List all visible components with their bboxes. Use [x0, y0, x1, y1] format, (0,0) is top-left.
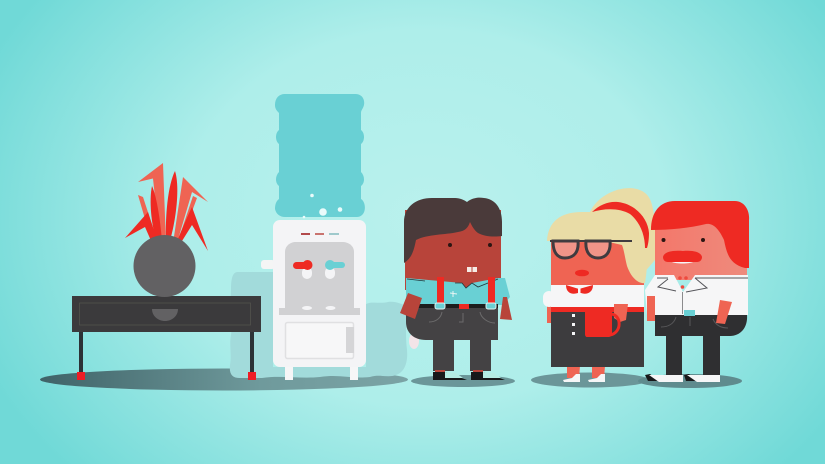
cooler ghost shadow	[230, 272, 407, 378]
buckle	[459, 304, 469, 309]
woman	[531, 202, 649, 388]
glasses	[553, 241, 610, 258]
taps spouts	[302, 267, 335, 279]
suspenders	[437, 277, 495, 304]
table legs	[79, 331, 254, 373]
vase	[134, 235, 196, 297]
clips	[435, 303, 496, 309]
teeth	[467, 267, 477, 272]
moustache	[663, 251, 702, 262]
legs	[433, 335, 491, 371]
pocket lines	[661, 317, 728, 328]
white glove	[409, 333, 419, 349]
head and body skin	[551, 240, 644, 310]
indicator lights	[301, 233, 339, 235]
shadow	[531, 372, 649, 388]
right arm	[500, 297, 512, 320]
hand	[614, 304, 628, 322]
cooler legs	[285, 365, 358, 380]
left arm	[647, 296, 655, 321]
door handle	[346, 327, 354, 353]
button line	[682, 292, 683, 314]
collar	[407, 279, 498, 288]
floor shadow	[40, 368, 408, 390]
red mug	[585, 310, 619, 337]
collar pin	[578, 288, 580, 293]
tabletop	[72, 296, 261, 332]
table feet	[77, 372, 256, 380]
drip tray	[279, 308, 360, 315]
red headband	[592, 202, 649, 248]
buttons	[572, 314, 575, 335]
bow collar	[566, 285, 593, 294]
eyes	[448, 243, 492, 247]
hair	[404, 198, 502, 263]
hot tap	[293, 260, 312, 270]
leaves: red	[125, 171, 208, 251]
trousers	[655, 315, 747, 336]
eyes	[662, 238, 705, 242]
belt	[406, 304, 498, 308]
left arm	[547, 303, 553, 323]
bow tie	[678, 276, 688, 289]
bubbles	[303, 194, 342, 218]
side spout	[261, 260, 275, 269]
belt buckle	[684, 310, 695, 316]
leaves: coral	[138, 163, 208, 244]
dispenser panel	[285, 242, 354, 312]
legs	[567, 366, 605, 378]
pocket pin	[450, 291, 457, 297]
table	[72, 296, 261, 380]
torso skin	[405, 210, 501, 290]
shadow	[638, 374, 742, 388]
legs	[666, 332, 720, 375]
man one	[400, 198, 515, 387]
man two	[638, 201, 749, 388]
water cooler	[261, 94, 366, 380]
skirt	[551, 312, 644, 367]
cabinet door	[286, 322, 354, 358]
blouse	[551, 285, 644, 307]
drawer outline	[80, 303, 250, 325]
waistband	[551, 307, 644, 312]
water bottle	[275, 94, 365, 217]
mug cup	[585, 310, 612, 337]
cold tap	[325, 260, 345, 270]
shirt	[406, 278, 510, 305]
shoes	[645, 374, 720, 382]
sleeve	[543, 291, 555, 307]
drawer handle	[152, 309, 178, 321]
trousers	[406, 305, 498, 340]
left arm	[400, 293, 422, 319]
smile	[672, 262, 693, 264]
collar stripes	[657, 278, 748, 292]
shoes	[433, 372, 505, 380]
plant	[125, 163, 208, 251]
shirt	[645, 275, 748, 315]
hair	[547, 212, 647, 283]
glasses arm	[550, 240, 632, 242]
cooler body	[273, 220, 366, 367]
heels	[563, 374, 605, 382]
socks	[435, 370, 483, 372]
shadow	[411, 375, 515, 387]
pocket lines	[429, 312, 495, 323]
hair	[651, 201, 749, 268]
mug handle	[610, 314, 619, 335]
lips	[575, 270, 589, 276]
back hair	[590, 188, 655, 275]
right arm	[716, 300, 732, 324]
head skin	[655, 215, 747, 280]
tray holes	[302, 306, 336, 310]
